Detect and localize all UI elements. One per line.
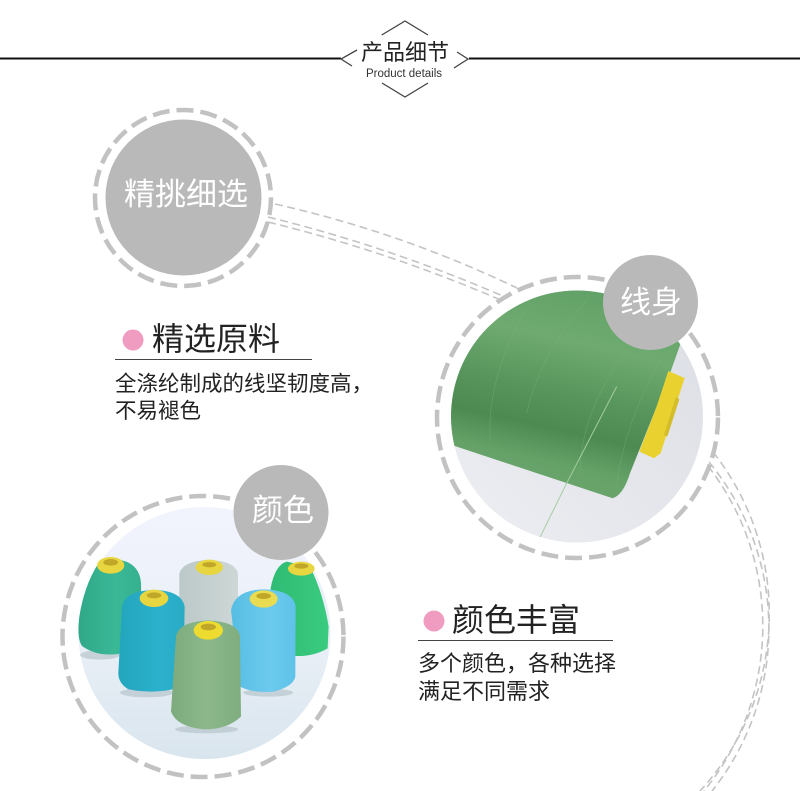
badge: carefully selected [95, 110, 271, 286]
spool: gray [179, 560, 238, 633]
spool: bright green [271, 562, 329, 656]
loose thread [540, 387, 617, 537]
heading: 颜色丰富 [452, 602, 580, 638]
text block: selected materials [115, 321, 373, 423]
body text: 全涤纶制成的线坚韧度高， [115, 372, 373, 396]
spool photo [451, 290, 685, 537]
header subtitle: Product details [366, 68, 442, 80]
header: product details [0, 21, 800, 97]
pink bullet [424, 610, 444, 632]
spool: sage green [171, 620, 241, 729]
photo disc [78, 507, 330, 759]
photo disc [451, 290, 703, 542]
label: 线身 [620, 285, 682, 320]
dashed ring [95, 110, 271, 286]
dashed ring [62, 496, 344, 777]
connector: dashed threads curving to bottom right [700, 452, 769, 791]
text block: selected materials: 不易褪色 [115, 399, 201, 423]
thread texture [490, 297, 660, 487]
label disc [234, 465, 328, 560]
label disc [603, 255, 698, 350]
dashed ring [437, 277, 718, 558]
green thread body [451, 290, 680, 498]
diamond frame [341, 21, 468, 97]
text block: rich colours: 满足不同需求 [418, 679, 550, 704]
badge label: 精挑细选 [124, 177, 248, 212]
underline [115, 359, 312, 360]
header rule right [469, 58, 800, 60]
body text: 多个颜色，各种选择 [418, 651, 616, 676]
underline [418, 640, 613, 641]
heading: 精选原料 [152, 321, 280, 357]
spool: sky blue [231, 589, 296, 692]
yellow core [639, 371, 685, 458]
gray disc [106, 120, 262, 276]
label: 颜色 [252, 493, 314, 528]
spools photo [78, 557, 329, 733]
header title: 产品细节 [361, 40, 449, 65]
photo circle: thread body [437, 255, 718, 558]
spool shadows [80, 650, 293, 733]
photo circle: colours [62, 465, 344, 777]
header rule left [0, 58, 341, 60]
pink bullet [122, 330, 144, 350]
text block: rich colours [418, 602, 616, 704]
core hollow [664, 397, 679, 437]
spool: cyan [118, 590, 185, 692]
connector: dashed threads from top circle to spool circle [268, 204, 517, 301]
spool: teal [78, 559, 142, 655]
